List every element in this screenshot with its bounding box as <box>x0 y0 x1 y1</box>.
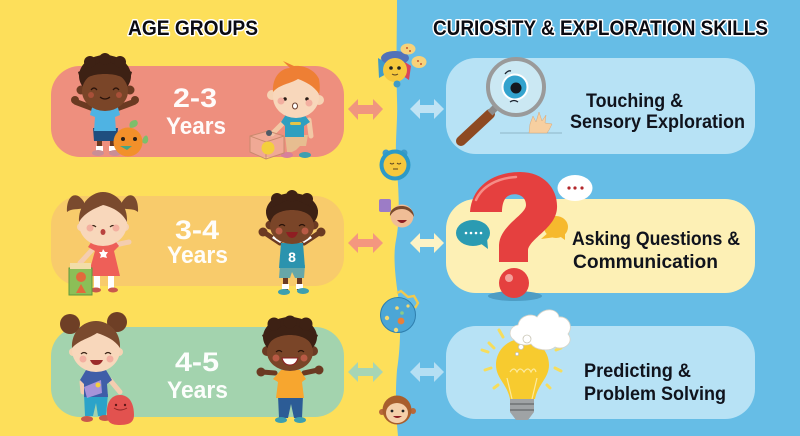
text: asking questions and communication <box>572 228 740 273</box>
icon: smiling fish with cookies <box>378 44 426 88</box>
arrow: 4-5 link <box>348 362 383 382</box>
label: 2-3 years <box>166 83 226 140</box>
arrow: 2-3 link <box>348 99 383 120</box>
label: 2-3 years: Years <box>166 113 226 140</box>
child: curly-haired boy with orange shirt <box>256 316 324 423</box>
icon: globe with handle <box>380 291 418 332</box>
arrow: 3-4 link <box>348 233 383 253</box>
icon: purple jar and smiling head <box>379 199 414 228</box>
child: girl with pigtails and red dress <box>67 192 138 292</box>
panel: touching and sensory exploration <box>446 58 755 154</box>
text: asking questions and communication: Communication <box>573 251 718 273</box>
label: 4-5 years <box>167 347 228 404</box>
icon: magnifying glass with eye and hand <box>461 59 562 141</box>
text: touching and sensory exploration <box>570 90 745 133</box>
icon: smiling orange <box>114 120 148 156</box>
icon: green shape bag <box>69 263 92 295</box>
text: touching and sensory exploration: Sensory Exploration <box>570 111 745 133</box>
text: touching and sensory exploration: Touching & <box>586 90 683 112</box>
icon: lightbulb with thought cloud <box>482 310 570 420</box>
panel: age 4-5 <box>51 312 344 425</box>
icon: sleepy alarm clock <box>380 150 410 180</box>
text: predicting and problem solving: Problem Solving <box>584 383 726 405</box>
icon: red question mark with speech bubbles <box>456 172 592 301</box>
text: predicting and problem solving: Predicting & <box>584 360 691 382</box>
panel: asking questions and communication <box>446 172 755 301</box>
panel: predicting and problem solving <box>446 310 755 420</box>
icon: red backpack <box>107 395 134 425</box>
arrow: questions link <box>410 233 444 253</box>
child: girl with hair buns and backpack <box>60 312 127 422</box>
heading: curiosity and exploration skills: CURIOSITY & EXPLORATION SKILLS <box>433 17 768 40</box>
label: 4-5 years: Years <box>167 377 228 404</box>
label: 2-3 years: 2-3 <box>173 83 217 113</box>
text: predicting and problem solving <box>584 360 726 405</box>
panel: age 2-3 <box>51 53 344 159</box>
label: 3-4 years <box>167 215 228 269</box>
label: 4-5 years: 4-5 <box>175 347 219 377</box>
arrow: touching link <box>410 99 444 119</box>
panel: age 3-4 <box>51 190 344 295</box>
heading: age groups: AGE GROUPS <box>128 17 258 40</box>
child: curly-haired boy with arms raised <box>258 190 326 295</box>
arrow: predicting link <box>410 362 444 382</box>
icon: monkey face <box>379 396 416 424</box>
text: asking questions and communication: Asking Questions & <box>572 228 740 250</box>
label: 3-4 years: Years <box>167 242 228 269</box>
label: 3-4 years: 3-4 <box>175 215 219 245</box>
child: curly-haired boy with blue shirt <box>71 53 139 156</box>
child: curly-haired boy with arms raised: 8 <box>288 249 296 265</box>
child: orange-haired boy with teal shirt <box>267 61 324 158</box>
blue background with wavy divider <box>395 0 800 436</box>
icon: transparent toy box <box>250 130 284 159</box>
